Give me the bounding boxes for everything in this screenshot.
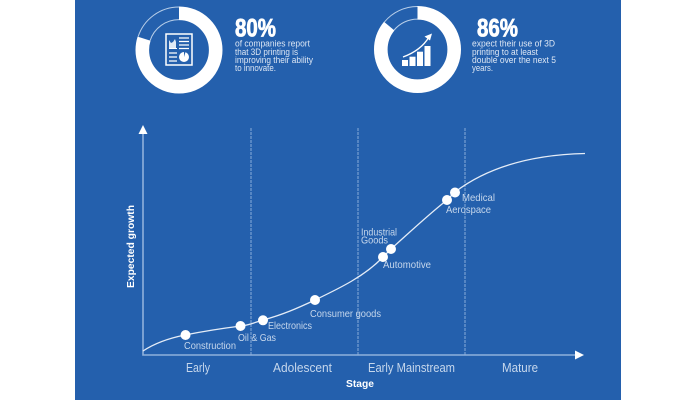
growth curve [143, 154, 585, 351]
data point labels [184, 193, 495, 352]
data point labels: Electronics [268, 321, 312, 332]
stat text: 80%: of companies report [235, 38, 310, 50]
data points [180, 188, 460, 340]
stage labels: Early Mainstream [368, 361, 455, 375]
stat heading: 80%: 80% [235, 14, 276, 42]
data point labels: Aerospace [446, 205, 491, 216]
growth chart [125, 125, 585, 390]
x axis title: Stage [346, 378, 374, 390]
data point labels: Oil & Gas [238, 333, 276, 344]
icon: rising bars and arrow [402, 34, 432, 66]
stat text: 86%: expect their use of 3D [472, 38, 555, 50]
data point labels: Industrial [361, 228, 397, 238]
blue background panel [75, 0, 621, 400]
donut chart: 86% [374, 6, 460, 92]
stage labels: Mature [502, 361, 538, 375]
data point labels: Construction [184, 341, 236, 352]
chart axes [138, 125, 584, 360]
stat text: 80%: to innovate. [235, 63, 276, 74]
stat heading: 86%: 86% [477, 14, 518, 42]
donut chart: 80% [136, 7, 222, 93]
stat text: 86%: double over the next 5 [472, 55, 556, 66]
stat text: 86%: years. [472, 63, 493, 74]
stage labels: Adolescent [273, 361, 332, 375]
data point labels: Medical [462, 193, 495, 204]
data point labels: Automotive [383, 260, 431, 271]
data point labels: Goods [361, 236, 388, 246]
stat text: 80%: that 3D printing is [235, 47, 298, 58]
stage labels: Early [186, 361, 211, 375]
data point labels: Consumer goods [310, 309, 381, 320]
stage dividers [251, 128, 465, 355]
stage labels [186, 361, 538, 375]
icon: report document [166, 34, 192, 65]
stat text: 80%: improving their ability [235, 55, 313, 66]
stat text: 86%: printing to at least [472, 47, 538, 58]
y axis title: Expected growth [125, 205, 137, 288]
